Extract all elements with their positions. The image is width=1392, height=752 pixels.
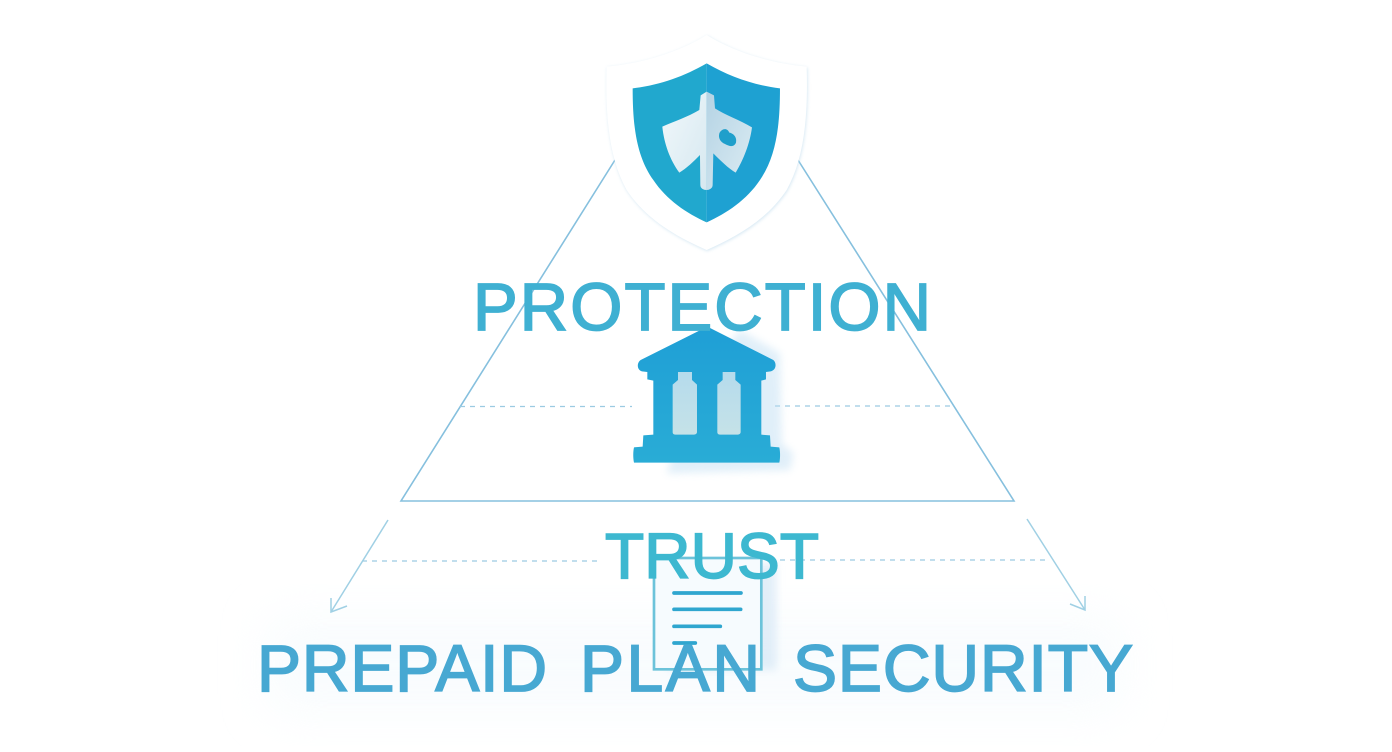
icon: document: [654, 558, 777, 670]
shield emblem right: [707, 92, 752, 190]
heading: prepaid plan security: [257, 631, 1133, 705]
document shadow: [667, 563, 777, 670]
icon: bank: [633, 327, 780, 463]
document sheet: [654, 558, 761, 669]
shield white border: [606, 35, 807, 250]
bank column left: [673, 372, 697, 435]
shield outer shadow: [607, 36, 808, 251]
bank column right: [717, 372, 741, 435]
shield emblem left: [662, 92, 707, 190]
heading: protection: PROTECTION: [473, 270, 931, 345]
bank body: [633, 327, 780, 463]
icon: shield: [606, 35, 808, 251]
heading: prepaid plan security: PREPAID: [257, 631, 547, 705]
background glow behind lower tier: [270, 620, 1120, 710]
icon: bank shadow: [667, 330, 793, 473]
arrow: lower right: [1027, 519, 1085, 610]
heading: trust: TRUST: [605, 520, 819, 592]
shield emblem heart hole: [719, 129, 736, 146]
heading: prepaid plan security: PLAN: [580, 631, 760, 705]
arrow: lower left: [331, 520, 388, 612]
shield right half: [707, 63, 780, 222]
heading: prepaid plan security: SECURITY: [793, 631, 1133, 705]
pyramid outline: [401, 160, 1014, 501]
pyramid dashed tier lines: [362, 406, 1050, 561]
document text lines: [674, 593, 741, 643]
shield left half: [633, 63, 707, 222]
